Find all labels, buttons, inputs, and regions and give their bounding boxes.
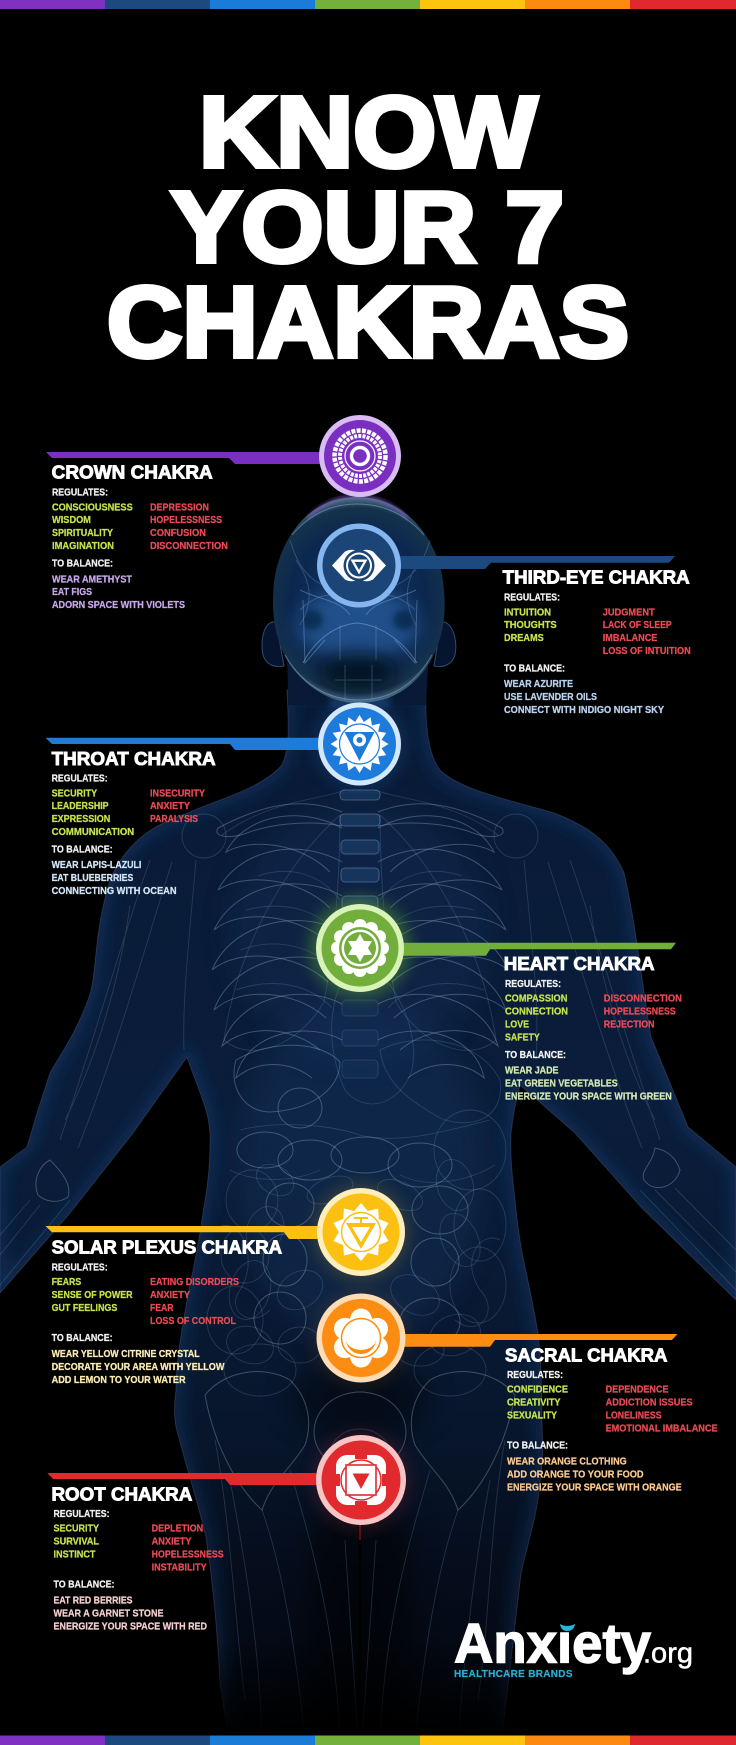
abdominal organs bbox=[207, 1040, 506, 1396]
imbalance list: DISCONNECTION bbox=[604, 994, 682, 1005]
ribcage and lungs bbox=[182, 790, 538, 1104]
balance list: WEAR AMETHYST bbox=[52, 574, 132, 585]
imbalance list: REJECTION bbox=[604, 1020, 654, 1030]
regulates list: SEXUALITY bbox=[507, 1410, 557, 1422]
imbalance list: LONELINESS bbox=[606, 1410, 662, 1422]
regulates list: INSTINCT bbox=[54, 1550, 96, 1560]
balance list bbox=[52, 1349, 225, 1386]
balance list: ENERGIZE YOUR SPACE WITH ORANGE bbox=[507, 1482, 682, 1494]
imbalance list: DISCONNECTION bbox=[150, 541, 228, 552]
spine bbox=[340, 790, 380, 1078]
imbalance list: JUDGMENT bbox=[603, 607, 655, 618]
regulates label: REGULATES: bbox=[505, 979, 561, 990]
imbalance list bbox=[604, 994, 682, 1030]
balance list: WEAR JADE bbox=[505, 1066, 559, 1077]
balance list: WEAR A GARNET STONE bbox=[54, 1608, 164, 1620]
balance list: WEAR YELLOW CITRINE CRYSTAL bbox=[52, 1349, 200, 1360]
imbalance list: CONFUSION bbox=[150, 528, 206, 539]
regulates label: REGULATES: bbox=[507, 1370, 563, 1381]
title bbox=[107, 76, 629, 378]
heading: sacral chakra: SACRAL CHAKRA bbox=[505, 1344, 667, 1365]
balance list: EAT FIGS bbox=[52, 587, 92, 598]
regulates list bbox=[507, 1385, 568, 1422]
imbalance list: LOSS OF INTUITION bbox=[603, 646, 691, 657]
to balance label: TO BALANCE: bbox=[52, 845, 113, 856]
to balance label: TO BALANCE: bbox=[507, 1441, 568, 1452]
heading: heart chakra: HEART CHAKRA bbox=[504, 953, 654, 974]
regulates label: REGULATES: bbox=[52, 488, 108, 499]
imbalance list: HOPELESSNESS bbox=[604, 1007, 676, 1018]
solar plexus connector bar bbox=[46, 1226, 322, 1239]
imbalance list bbox=[152, 1524, 224, 1574]
to balance label: TO BALANCE: bbox=[54, 1580, 114, 1591]
balance list bbox=[52, 860, 177, 897]
balance list bbox=[54, 1596, 207, 1632]
regulates list bbox=[52, 788, 134, 838]
ears bbox=[262, 622, 456, 667]
regulates list: COMPASSION bbox=[505, 994, 567, 1005]
imbalance list: ADDICTION ISSUES bbox=[606, 1398, 693, 1408]
balance list: WEAR LAPIS-LAZULI bbox=[52, 860, 142, 871]
balance list: EAT BLUEBERRIES bbox=[52, 873, 134, 884]
regulates list: FEARS bbox=[52, 1277, 82, 1288]
regulates list bbox=[54, 1524, 99, 1560]
imbalance list bbox=[606, 1385, 718, 1434]
regulates label: REGULATES: bbox=[52, 1262, 108, 1274]
panel: solar plexus chakra bbox=[52, 1237, 282, 1386]
imbalance list: ANXIETY bbox=[150, 1290, 190, 1301]
regulates list: SECURITY bbox=[54, 1524, 99, 1535]
head bbox=[262, 496, 456, 708]
crown glow on head bbox=[308, 496, 407, 518]
imbalance list bbox=[150, 1277, 239, 1327]
icon: throat chakra bbox=[318, 702, 401, 786]
regulates list bbox=[52, 502, 133, 552]
root connector bar bbox=[47, 1473, 322, 1485]
regulates list: IMAGINATION bbox=[52, 541, 114, 552]
skull bbox=[273, 497, 445, 703]
icon: sacral chakra bbox=[316, 1294, 406, 1382]
imbalance list: INSECURITY bbox=[150, 788, 205, 799]
regulates list: LEADERSHIP bbox=[52, 801, 109, 812]
chakra glows bbox=[310, 698, 410, 1540]
sacral connector bar bbox=[400, 1334, 678, 1347]
balance list: DECORATE YOUR AREA WITH YELLOW bbox=[52, 1362, 225, 1373]
balance list bbox=[507, 1456, 682, 1494]
regulates list: LOVE bbox=[505, 1020, 529, 1030]
regulates label: REGULATES: bbox=[504, 593, 560, 604]
balance list: WEAR AZURITE bbox=[504, 679, 573, 690]
imbalance list: LACK OF SLEEP bbox=[603, 620, 672, 631]
regulates list bbox=[505, 994, 568, 1043]
title: KNOW bbox=[199, 76, 538, 188]
panel: sacral chakra bbox=[505, 1344, 718, 1494]
imbalance list: LOSS OF CONTROL bbox=[150, 1316, 236, 1327]
regulates list: THOUGHTS bbox=[504, 620, 557, 631]
crown connector bar bbox=[46, 452, 322, 464]
regulates list: GUT FEELINGS bbox=[52, 1303, 118, 1314]
title: YOUR 7 bbox=[171, 172, 564, 284]
third-eye connector bar bbox=[398, 556, 675, 569]
heading: solar plexus chakra: SOLAR PLEXUS CHAKRA bbox=[52, 1237, 282, 1258]
imbalance list: IMBALANCE bbox=[603, 633, 658, 644]
imbalance list: HOPELESSNESS bbox=[150, 515, 222, 526]
regulates list: SAFETY bbox=[505, 1032, 540, 1043]
icon: crown chakra bbox=[319, 415, 401, 497]
imbalance list: EMOTIONAL IMBALANCE bbox=[606, 1424, 718, 1434]
balance list: CONNECTING WITH OCEAN bbox=[52, 886, 177, 897]
to balance label: TO BALANCE: bbox=[52, 558, 113, 569]
throat connector bar bbox=[46, 738, 322, 750]
logo: Anxiety.org: .org bbox=[643, 1638, 693, 1670]
regulates list bbox=[504, 607, 557, 644]
regulates list: CREATIVITY bbox=[507, 1398, 561, 1408]
regulates list: CONFIDENCE bbox=[507, 1385, 568, 1396]
regulates label: REGULATES: bbox=[54, 1509, 110, 1520]
balance list bbox=[504, 679, 664, 716]
imbalance list: DEPLETION bbox=[152, 1524, 203, 1535]
logo: Anxiety.org: HEALTHCARE BRANDS bbox=[454, 1669, 573, 1680]
imbalance list: HOPELESSNESS bbox=[152, 1550, 224, 1560]
pelvis and legs bbox=[205, 1372, 515, 1745]
balance list: ENERGIZE YOUR SPACE WITH GREEN bbox=[505, 1092, 672, 1102]
imbalance list: FEAR bbox=[150, 1303, 174, 1314]
title: CHAKRAS bbox=[107, 266, 629, 378]
regulates list: SECURITY bbox=[52, 788, 98, 799]
balance list: ADD ORANGE TO YOUR FOOD bbox=[507, 1470, 644, 1480]
panel: crown chakra bbox=[52, 462, 228, 611]
heading: throat chakra: THROAT CHAKRA bbox=[52, 748, 216, 769]
body inner shading bbox=[0, 690, 736, 1745]
imbalance list: PARALYSIS bbox=[150, 814, 198, 825]
regulates list: WISDOM bbox=[52, 515, 91, 526]
heading: crown chakra: CROWN CHAKRA bbox=[52, 462, 213, 483]
regulates list: SENSE OF POWER bbox=[52, 1290, 133, 1301]
imbalance list: EATING DISORDERS bbox=[150, 1277, 239, 1288]
regulates list: COMMUNICATION bbox=[52, 827, 134, 838]
icon: third-eye chakra bbox=[317, 524, 401, 608]
balance list: CONNECT WITH INDIGO NIGHT SKY bbox=[504, 705, 664, 716]
regulates list: INTUITION bbox=[504, 607, 551, 618]
imbalance list: DEPENDENCE bbox=[606, 1385, 669, 1396]
regulates list: CONNECTION bbox=[505, 1007, 568, 1018]
balance list: ADD LEMON TO YOUR WATER bbox=[52, 1375, 186, 1386]
icon: heart chakra bbox=[316, 904, 404, 992]
balance list: USE LAVENDER OILS bbox=[504, 692, 597, 703]
imbalance list: DEPRESSION bbox=[150, 502, 209, 513]
to balance label: TO BALANCE: bbox=[504, 663, 565, 674]
to balance label: TO BALANCE: bbox=[505, 1050, 566, 1061]
panel: throat chakra bbox=[52, 748, 216, 897]
regulates list: DREAMS bbox=[504, 633, 544, 644]
balance list: ENERGIZE YOUR SPACE WITH RED bbox=[54, 1622, 207, 1632]
regulates label: REGULATES: bbox=[52, 774, 108, 785]
arms bbox=[0, 860, 736, 1290]
top rainbow bar bbox=[0, 0, 736, 9]
imbalance list bbox=[150, 788, 205, 825]
imbalance list: ANXIETY bbox=[152, 1536, 192, 1548]
regulates list bbox=[52, 1277, 133, 1314]
bottom rainbow bar bbox=[0, 1736, 736, 1745]
heading: root chakra: ROOT CHAKRA bbox=[52, 1483, 192, 1504]
panel: third-eye chakra bbox=[503, 566, 691, 716]
body silhouette bbox=[0, 690, 736, 1745]
balance list bbox=[505, 1066, 672, 1102]
imbalance list bbox=[603, 607, 691, 657]
regulates list: SPIRITUALITY bbox=[52, 528, 113, 539]
heart connector bar bbox=[400, 943, 676, 956]
imbalance list: INSTABILITY bbox=[152, 1562, 207, 1574]
balance list: EAT GREEN VEGETABLES bbox=[505, 1079, 618, 1090]
heading: third-eye chakra: THIRD-EYE CHAKRA bbox=[503, 566, 690, 587]
imbalance list bbox=[150, 502, 228, 552]
balance list: WEAR ORANGE CLOTHING bbox=[507, 1456, 627, 1468]
balance list: ADORN SPACE WITH VIOLETS bbox=[52, 600, 185, 611]
balance list: EAT RED BERRIES bbox=[54, 1596, 133, 1606]
regulates list: SURVIVAL bbox=[54, 1536, 99, 1548]
icon: root chakra bbox=[316, 1435, 406, 1525]
panel: root chakra bbox=[52, 1483, 224, 1632]
imbalance list: ANXIETY bbox=[150, 801, 190, 812]
icon: solar plexus chakra bbox=[317, 1188, 405, 1276]
panel: heart chakra bbox=[504, 953, 682, 1102]
logo: Anxiety.org: Anxiety bbox=[454, 1612, 651, 1675]
regulates list: CONSCIOUSNESS bbox=[52, 502, 133, 513]
regulates list: EXPRESSION bbox=[52, 814, 110, 825]
to balance label: TO BALANCE: bbox=[52, 1333, 113, 1344]
neck bbox=[287, 660, 428, 705]
body illustration bbox=[0, 690, 736, 1745]
balance list bbox=[52, 574, 185, 611]
